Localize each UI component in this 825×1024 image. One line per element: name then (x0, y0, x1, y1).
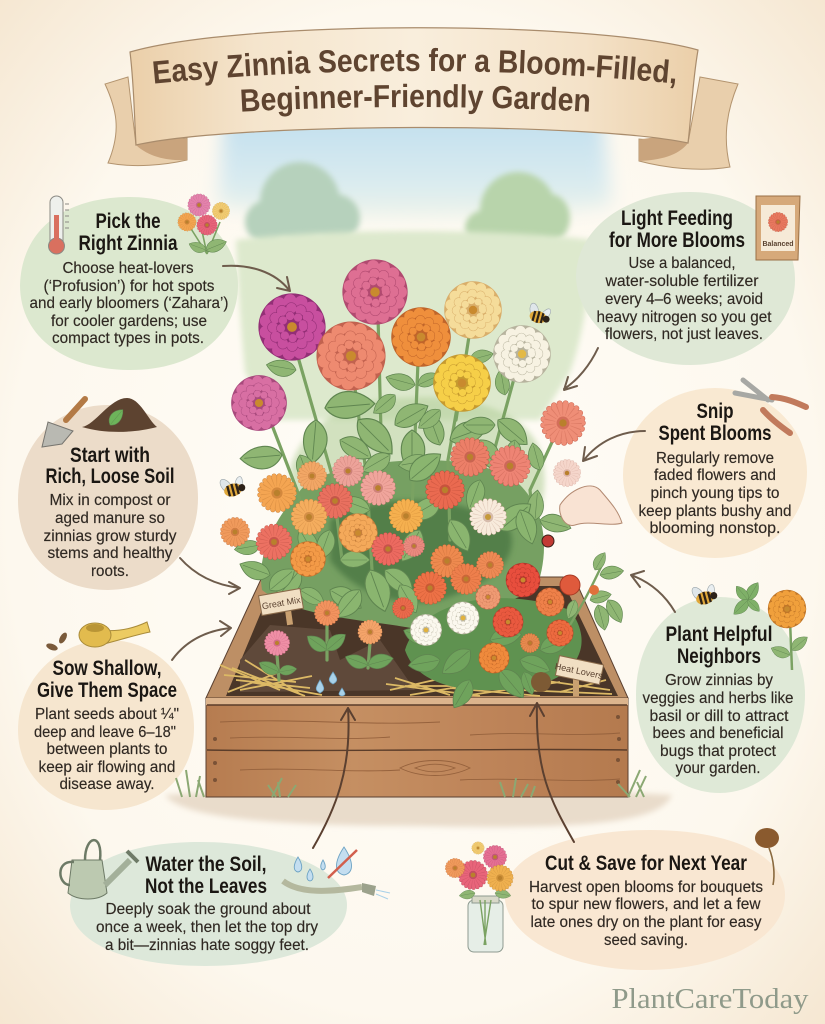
bubble: start with rich soil (18, 405, 198, 590)
text: water the soil: a bit—zinnias hate soggy feet. (105, 937, 309, 954)
text: cut and save: late ones dry on the plant for easy (530, 914, 762, 931)
arrow from water (313, 708, 355, 848)
text: light feeding: Light Feeding (621, 207, 733, 230)
text: start with rich loose soil: Mix in compost or (50, 492, 171, 509)
text: start with rich loose soil (44, 444, 176, 580)
text: sow shallow: between plants to (46, 741, 168, 758)
icon: pruners (735, 380, 806, 433)
text: sow shallow: deep and leave 6–18" (34, 724, 176, 741)
bubble: light feeding (576, 192, 795, 365)
bubble: helpful neighbors (636, 597, 805, 793)
arrow from light feeding (564, 348, 598, 390)
text: water the soil: Deeply soak the ground about (106, 901, 311, 918)
text: light feeding (596, 207, 772, 343)
text: water the soil: once a week, then let the top dry (96, 919, 318, 936)
text: sow shallow: disease away. (60, 776, 154, 793)
bubble: water the soil (70, 842, 347, 966)
arrow from snip (583, 431, 645, 461)
text: start with rich loose soil: roots. (91, 563, 129, 580)
text: snip spent blooms: Spent Blooms (658, 422, 772, 445)
text: light feeding: water-soluble fertilizer (605, 273, 759, 290)
text: cut and save: Cut & Save for Next Year (545, 852, 747, 875)
arrow to tall zinnias (223, 266, 290, 291)
plant sign: Great Mix (259, 589, 303, 625)
text: pick the right zinnia: Right Zinnia (78, 232, 178, 255)
text: start with rich loose soil: stems and healthy (48, 545, 172, 562)
water drops (316, 672, 345, 696)
text: water the soil (96, 853, 318, 954)
plank nails (213, 715, 621, 784)
right ribbon tail (639, 77, 738, 169)
title text: Easy Zinnia Secrets for a Bloom-Filled, (153, 48, 676, 88)
bubble: snip spent blooms (623, 388, 807, 558)
left ribbon fold (136, 138, 187, 160)
front planks (206, 698, 628, 797)
arrow from cut and save (530, 703, 574, 842)
text: sow shallow: Sow Shallow, (52, 657, 162, 680)
foliage mass (261, 460, 544, 630)
icon: herb and marigold (730, 580, 810, 670)
icon: mason jar bouquet (446, 842, 512, 952)
arrow from sow shallow (172, 621, 231, 660)
text: plant helpful neighbors: Neighbors (677, 645, 761, 668)
text: plant helpful neighbors: Plant Helpful (666, 623, 772, 646)
title text (153, 48, 676, 116)
text: plant helpful neighbors: Grow zinnias by (665, 672, 773, 689)
back and side rims (206, 577, 628, 698)
callout bubbles background shapes (18, 192, 807, 970)
ground shadow (165, 790, 672, 827)
lower right foliage (405, 598, 582, 690)
text: light feeding: heavy nitrogen so you get (596, 309, 772, 326)
lower right leaves (256, 624, 573, 712)
raised bed with soil (165, 577, 672, 827)
icon: trowel and soil (42, 398, 157, 447)
text: plant helpful neighbors: your garden. (676, 760, 760, 777)
text: sow shallow: Give Them Space (37, 679, 177, 702)
text: sow shallow: keep air flowing and (38, 759, 176, 776)
soil (226, 586, 618, 696)
text: snip spent blooms: pinch young tips to (650, 485, 780, 502)
icon: pinching hand (560, 486, 622, 525)
text: start with rich loose soil: Start with (70, 444, 150, 467)
text: light feeding: for More Blooms (609, 229, 745, 252)
text: pick the right zinnia (30, 210, 228, 347)
straw mulch (220, 660, 612, 696)
icon: water drops and hose (283, 847, 390, 899)
zinnia plants (222, 259, 604, 712)
plant sign: Heat Lovers: Heat Lovers (554, 661, 604, 681)
brand wordmark: PlantCareToday (612, 983, 809, 1015)
text: snip spent blooms: Regularly remove (656, 450, 774, 467)
text: plant helpful neighbors: veggies and herbs like (642, 690, 794, 707)
title text: Beginner-Friendly Garden (241, 84, 590, 116)
bubble: pick the right zinnia (20, 197, 238, 370)
icon: fertilizer bag: Balanced (762, 241, 794, 248)
text: water the soil: Water the Soil, (146, 853, 266, 876)
large zinnia heads (231, 259, 583, 443)
arrow from start with soil (180, 558, 240, 594)
text: snip spent blooms (638, 400, 792, 537)
text: pick the right zinnia: Choose heat-lovers (62, 260, 194, 277)
text: water the soil: Not the Leaves (145, 875, 267, 898)
text: light feeding: Use a balanced, (628, 255, 736, 272)
text: start with rich loose soil: aged manure so (55, 510, 165, 527)
arrow from helpful neighbors (631, 571, 675, 612)
text: cut and save: to spur new flowers, and let a few (532, 896, 761, 913)
small bed zinnia heads (266, 585, 573, 673)
icon: fertilizer bag (756, 196, 800, 260)
left ribbon tail (105, 77, 187, 166)
text: sow shallow (34, 657, 179, 793)
pine cone (531, 672, 551, 692)
pale foliage behind stems (290, 397, 545, 530)
text: cut and save (529, 852, 763, 949)
text: cut and save: Harvest open blooms for bouquets (529, 879, 763, 896)
bubble: sow shallow (18, 640, 194, 810)
text: snip spent blooms: faded flowers and (654, 467, 776, 484)
icon: bumblebees (217, 300, 720, 607)
text: cut and save: seed saving. (604, 932, 688, 949)
main ribbon (130, 28, 698, 145)
text: pick the right zinnia: (‘Profusion’) for hot spots (44, 278, 214, 295)
text: start with rich loose soil: zinnias grow sturdy (44, 528, 176, 545)
text: pick the right zinnia: Pick the (96, 210, 160, 233)
deep foliage shadow (330, 500, 512, 603)
tomato plant (542, 535, 628, 632)
stems (270, 316, 553, 680)
text: start with rich loose soil: Rich, Loose Soil (46, 465, 174, 488)
text: snip spent blooms: keep plants bushy and (638, 503, 792, 520)
text: light feeding: every 4–6 weeks; avoid (605, 291, 763, 308)
bubble: cut and save (505, 830, 785, 970)
text: snip spent blooms: Snip (696, 400, 734, 423)
text: plant helpful neighbors (642, 623, 794, 777)
icon: measuring tape and seeds (45, 622, 150, 652)
text: pick the right zinnia: compact types in pots. (52, 330, 204, 347)
grass tufts (176, 770, 646, 797)
medium zinnia heads (222, 440, 579, 603)
text: pick the right zinnia: for cooler gardens; use (51, 313, 207, 330)
plant sign: Great Mix: Great Mix (261, 595, 302, 611)
text: light feeding: flowers, not just leaves. (605, 326, 763, 343)
text: plant helpful neighbors: basil or dill to attract (650, 708, 789, 725)
text: plant helpful neighbors: bees and beneficial (652, 725, 784, 742)
icon: watering can (60, 840, 138, 899)
text: pick the right zinnia: and early bloomers (‘Zahara’) (30, 295, 228, 312)
icon: thermometer (48, 196, 69, 254)
icon: dried seed head (755, 828, 779, 885)
sky (218, 100, 612, 218)
garden landscape wash (218, 100, 612, 420)
distant trees (245, 162, 570, 248)
text: sow shallow: Plant seeds about ¼" (35, 706, 179, 723)
text: snip spent blooms: blooming nonstop. (650, 520, 780, 537)
right ribbon fold (639, 137, 688, 161)
callout arrows (172, 266, 675, 848)
tall plant leaves (239, 347, 573, 536)
title banner (104, 27, 739, 170)
meadow (236, 231, 592, 420)
icon: zinnia bouquet (179, 195, 229, 255)
text: plant helpful neighbors: bugs that protect (660, 743, 777, 760)
mid foliage leaves (233, 445, 542, 624)
plant sign: Heat Lovers (554, 656, 604, 696)
